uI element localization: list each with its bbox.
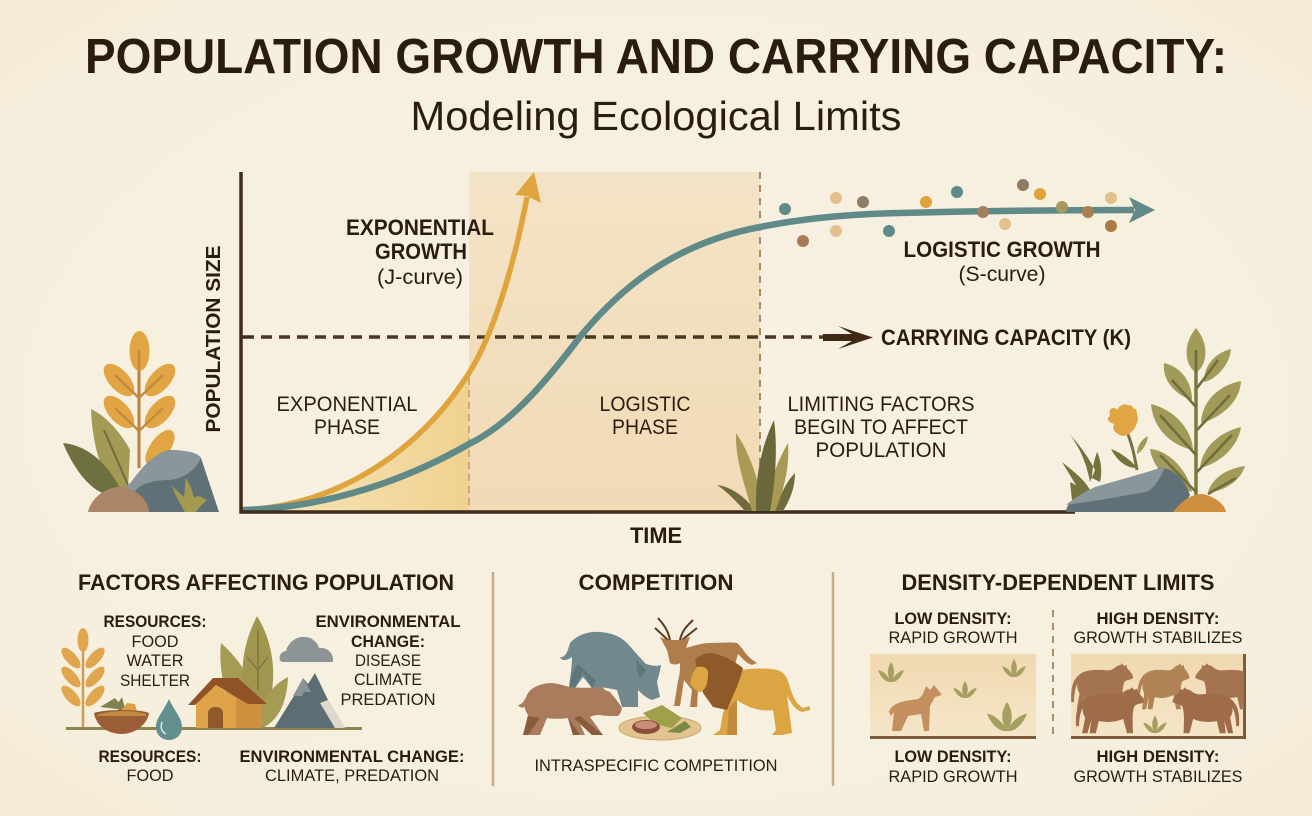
label: logistic growth: LOGISTIC GROWTH (904, 237, 1100, 262)
icon: mountain (274, 673, 345, 728)
icon: ground line (66, 727, 362, 730)
main chart (203, 172, 1155, 548)
icon: brown bear (518, 683, 622, 735)
low density top text: RAPID GROWTH (888, 628, 1018, 647)
label: logistic phase: LOGISTIC (600, 393, 690, 416)
icon: tall leaves (220, 616, 288, 728)
deer (889, 685, 942, 731)
panel: density-dependent limits (870, 570, 1258, 786)
text: environmental change climate (240, 747, 464, 785)
caption: INTRASPECIFIC COMPETITION (534, 756, 778, 775)
label: logistic phase: PHASE (612, 416, 678, 439)
logistic S curve (241, 197, 1155, 510)
text: environmental change list: PREDATION (340, 690, 436, 709)
title: POPULATION GROWTH AND CARRYING CAPACITY: (85, 30, 1227, 84)
icon: house (188, 678, 267, 728)
text: resources list: RESOURCES: (104, 612, 206, 631)
low density top text: LOW DENSITY: (894, 609, 1012, 628)
high density bottom text: HIGH DENSITY: (1096, 747, 1220, 766)
right plant and rock illustration (1062, 328, 1245, 512)
subtitle: Modeling Ecological Limits (410, 93, 902, 139)
low density bottom text: RAPID GROWTH (888, 767, 1018, 786)
low density bottom text (888, 747, 1018, 786)
icon: antelope (655, 618, 757, 707)
low density top text (888, 609, 1018, 647)
text: environmental change list: ENVIRONMENTAL (316, 612, 460, 631)
population dots (779, 179, 1117, 247)
text: resources list: SHELTER (120, 671, 190, 690)
panel: competition (518, 570, 810, 775)
icon: plate of food (619, 705, 701, 740)
high density top text: HIGH DENSITY: (1096, 609, 1220, 628)
text: resources list: FOOD (132, 632, 178, 651)
title (85, 30, 1227, 139)
x axis label: TIME (630, 523, 682, 548)
label: exponential growth (346, 215, 494, 289)
icon: grass at chart base (717, 420, 795, 511)
label: logistic growth: (S-curve) (958, 263, 1046, 286)
high density top text: GROWTH STABILIZES (1074, 628, 1242, 647)
low density bottom text: LOW DENSITY: (894, 747, 1012, 766)
axes (241, 172, 1075, 512)
high density panel (1071, 654, 1258, 739)
high density top text (1074, 609, 1242, 647)
text: environmental change list (316, 612, 460, 709)
icon: gray boar (560, 632, 661, 707)
label: logistic growth (904, 237, 1100, 286)
label: logistic phase (600, 393, 690, 439)
panel: factors affecting population (58, 570, 465, 785)
text: resources list: WATER (126, 651, 184, 670)
text: environmental change list: DISEASE (355, 651, 421, 670)
icon: water drop (156, 699, 182, 740)
exponential J curve (241, 172, 541, 510)
text: resources list (104, 612, 206, 690)
text: environmental change climate: ENVIRONMENTAL CHANGE: (240, 747, 464, 766)
heading: FACTORS AFFECTING POPULATION (78, 570, 454, 595)
left plant and rock illustration (63, 331, 219, 512)
carrying capacity dashed line (243, 325, 1131, 350)
label: limiting factors: POPULATION (816, 439, 946, 462)
text: environmental change climate: CLIMATE, PREDATION (265, 766, 439, 785)
text: resources food: RESOURCES: (98, 747, 202, 766)
y axis label: POPULATION SIZE (203, 246, 225, 432)
label: limiting factors: LIMITING FACTORS (788, 393, 974, 416)
text: resources food (98, 747, 202, 785)
high density bottom text: GROWTH STABILIZES (1074, 767, 1242, 786)
heading: COMPETITION (578, 570, 734, 595)
heading: DENSITY-DEPENDENT LIMITS (902, 570, 1214, 595)
label: exponential phase: PHASE (314, 416, 380, 439)
label: exponential growth: (J-curve) (377, 266, 463, 289)
label: exponential phase: EXPONENTIAL (276, 393, 418, 416)
carrying capacity dashed line: CARRYING CAPACITY (K) (881, 325, 1131, 350)
icon: food bowl (94, 697, 149, 734)
icon: wheat (58, 628, 108, 729)
label: limiting factors: BEGIN TO AFFECT (794, 416, 968, 439)
icon: cloud (280, 637, 333, 662)
dividers (493, 572, 833, 786)
logistic phase band (469, 172, 760, 512)
exponential phase shaded area (241, 373, 469, 512)
label: exponential growth: GROWTH (375, 239, 467, 264)
divider (1052, 610, 1054, 740)
label: exponential phase (276, 393, 418, 439)
text: resources food: FOOD (126, 766, 174, 785)
high density bottom text (1074, 747, 1242, 786)
icon: lion (690, 653, 810, 735)
label: limiting factors (788, 393, 974, 462)
low density panel (870, 654, 1036, 739)
label: exponential growth: EXPONENTIAL (346, 215, 494, 240)
text: environmental change list: CHANGE: (351, 632, 425, 651)
text: environmental change list: CLIMATE (354, 670, 422, 689)
